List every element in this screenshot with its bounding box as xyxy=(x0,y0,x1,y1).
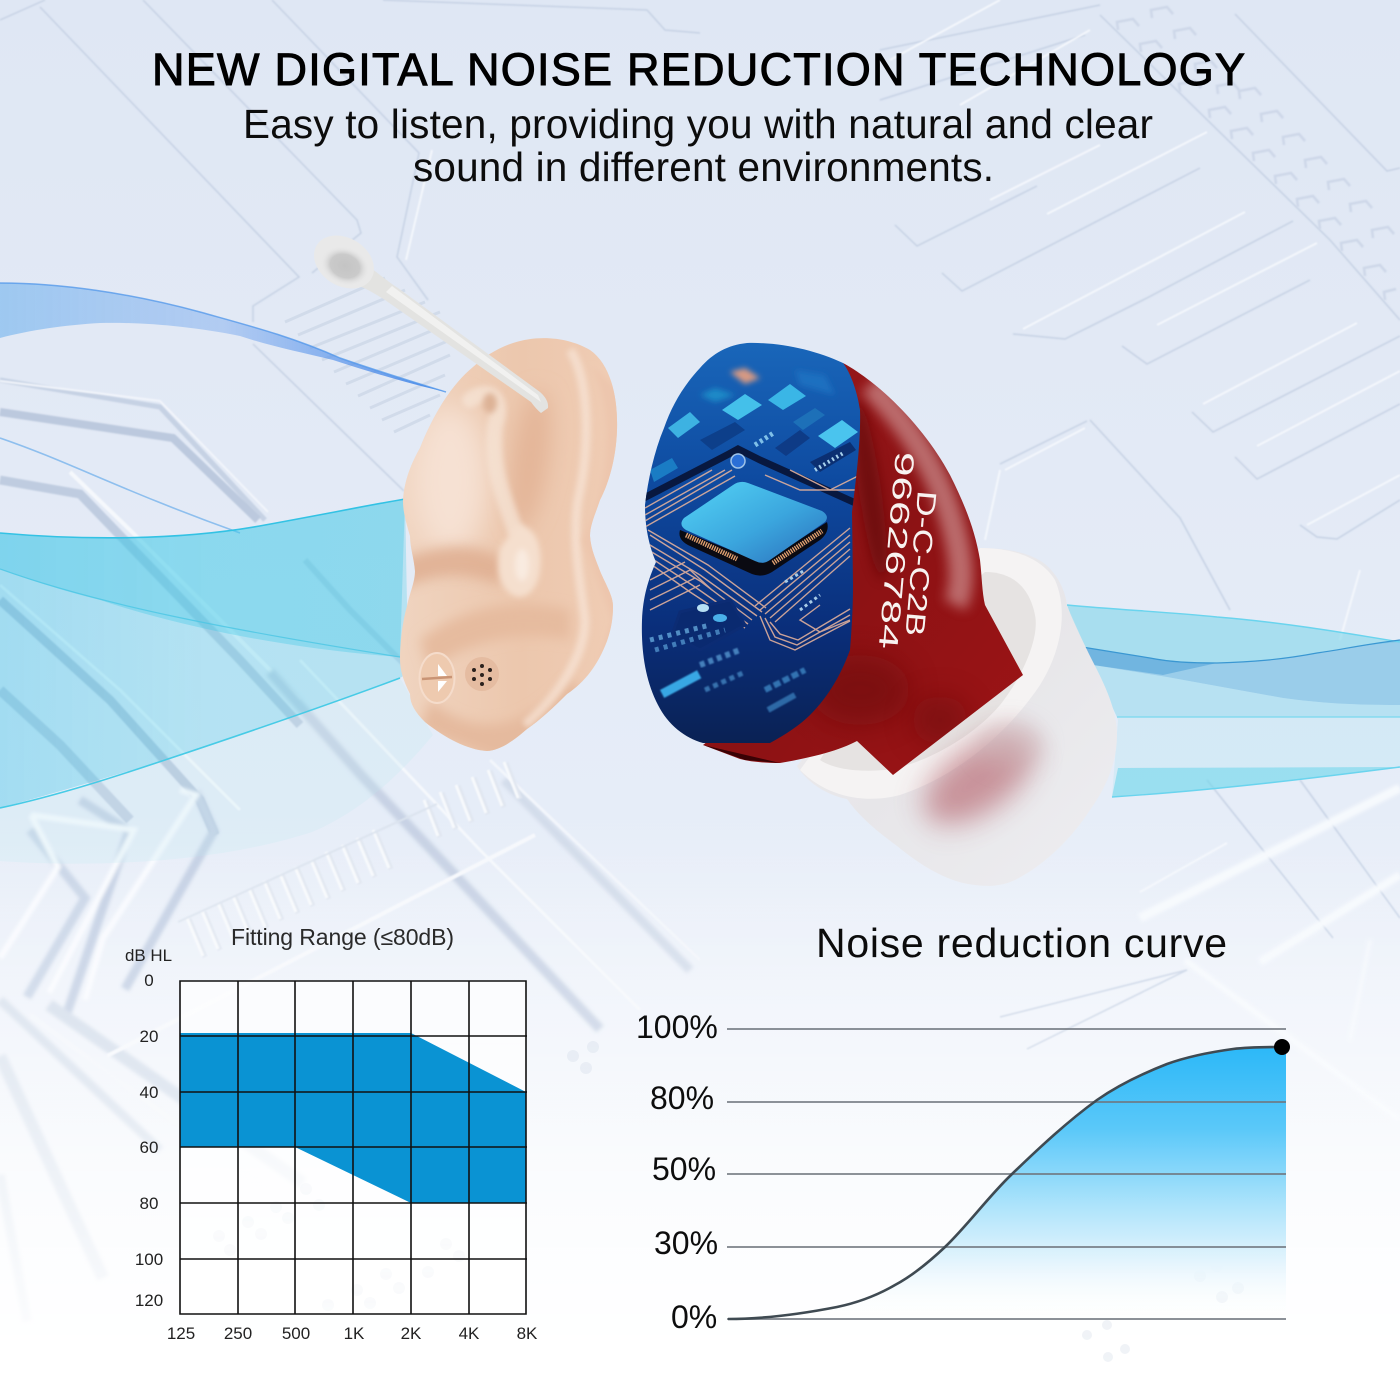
title: NEW DIGITAL NOISE REDUCTION TECHNOLOGY xyxy=(152,44,1245,95)
processor chip xyxy=(679,482,828,576)
area under curve xyxy=(728,1047,1286,1319)
circuit board face xyxy=(642,342,860,743)
y axis labels: 100% xyxy=(636,1009,718,1045)
grid background xyxy=(180,981,526,1314)
background: bright circuit lines xyxy=(406,0,1400,892)
hearing aid: cutaway with circuit and dome xyxy=(635,335,1130,890)
y axis labels: 0% xyxy=(671,1299,717,1335)
subtitle xyxy=(243,101,1153,190)
small components xyxy=(650,368,858,482)
copper traces xyxy=(645,470,860,650)
lower components xyxy=(650,570,820,710)
x axis labels: 1K xyxy=(344,1324,365,1343)
subtitle: sound in different environments. xyxy=(413,144,994,190)
background: wide white bands right xyxy=(1140,788,1400,1120)
curve line xyxy=(728,1047,1282,1319)
grid lines xyxy=(180,981,527,1314)
y axis labels: 100 xyxy=(135,1250,163,1269)
y axis labels: 40 xyxy=(140,1083,158,1102)
background: lower left strips xyxy=(0,790,303,1321)
chart title: Fitting Range (≤80dB) xyxy=(231,924,454,950)
wave: blue ribbon left xyxy=(0,283,446,533)
wave: cyan ribbon left xyxy=(0,499,433,864)
y axis labels: 20 xyxy=(140,1027,158,1046)
volume switch xyxy=(420,653,454,703)
background: hatch strips near ear xyxy=(285,278,450,432)
y axis labels: 80 xyxy=(140,1194,158,1213)
y axis unit: dB HL xyxy=(125,947,172,965)
x axis labels: 2K xyxy=(401,1324,422,1343)
ear shell body xyxy=(400,338,618,751)
microphone grille xyxy=(465,657,499,691)
y axis labels: 50% xyxy=(652,1151,716,1187)
chart: noise reduction curve xyxy=(636,920,1290,1335)
pull-out spoon handle xyxy=(304,225,548,413)
y axis labels: 60 xyxy=(140,1138,158,1157)
x axis labels: 125 xyxy=(167,1324,195,1343)
subtitle: Easy to listen, providing you with natural and clear xyxy=(243,101,1153,147)
y axis labels xyxy=(636,1009,718,1335)
serial text: D-C-C2B xyxy=(899,489,942,638)
board frame xyxy=(640,449,860,505)
x axis labels xyxy=(167,1324,538,1343)
y axis labels: 80% xyxy=(650,1080,714,1116)
hearing aid: skin-tone shell xyxy=(314,236,618,751)
y axis labels: 0 xyxy=(144,971,154,990)
serial text: 96626784 xyxy=(873,450,920,650)
x axis labels: 500 xyxy=(282,1324,310,1343)
fitting range area xyxy=(180,1033,526,1203)
grid lines xyxy=(727,1029,1286,1319)
x axis labels: 8K xyxy=(517,1324,538,1343)
wave: ribbons right xyxy=(1067,605,1400,797)
background: lower whitening xyxy=(0,820,1400,1400)
background: thin circuit lines xyxy=(0,0,1400,1049)
silicone dome tip xyxy=(790,540,1130,890)
chart: fitting range xyxy=(125,924,538,1343)
serial text xyxy=(873,450,942,650)
x axis labels: 4K xyxy=(459,1324,480,1343)
background: faint dots xyxy=(213,1041,1244,1362)
y axis labels xyxy=(135,971,163,1310)
chart title: Noise reduction curve xyxy=(816,920,1227,966)
background: comb panel lower xyxy=(107,762,535,1056)
end point xyxy=(1274,1039,1290,1055)
red shell xyxy=(700,350,1040,780)
x axis labels: 250 xyxy=(224,1324,252,1343)
background: pad markers top right xyxy=(1117,7,1396,300)
y axis labels: 120 xyxy=(135,1291,163,1310)
background: soft circuit bands left xyxy=(0,380,700,1029)
y axis labels: 30% xyxy=(654,1225,718,1261)
